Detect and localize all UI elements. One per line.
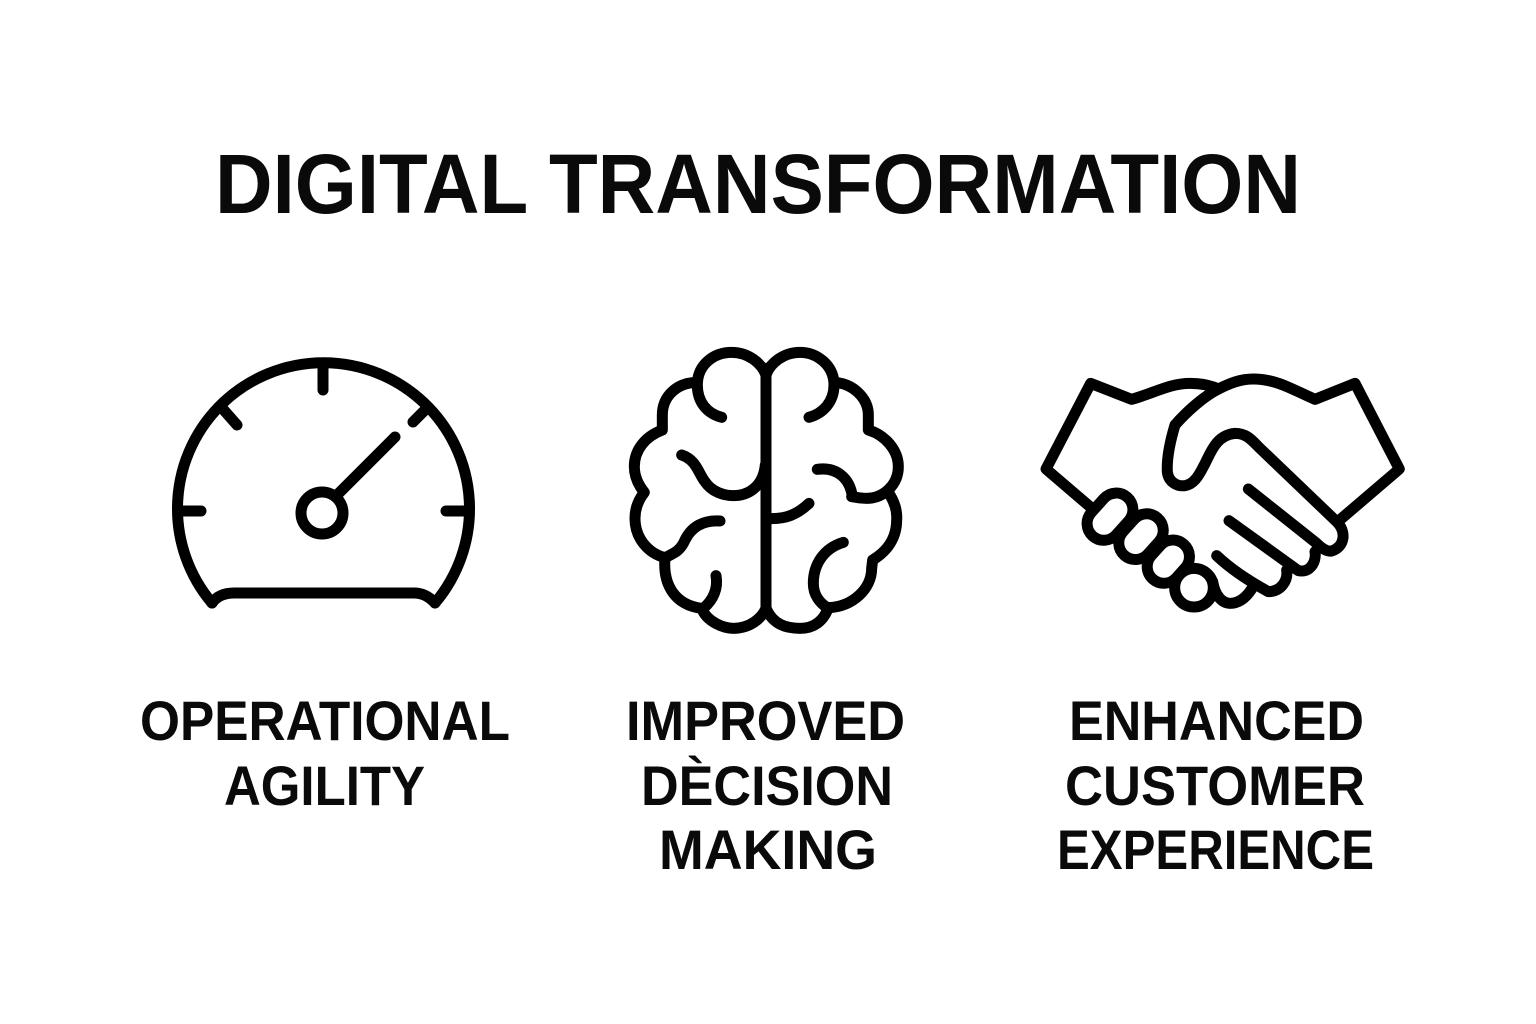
icon: speedometer gauge <box>178 363 470 603</box>
label: operational agility <box>140 689 510 817</box>
label: improved decision making: DÈCISION <box>641 754 893 817</box>
label: improved decision making: IMPROVED <box>626 689 905 752</box>
label: enhanced customer experience: CUSTOMER <box>1065 754 1365 817</box>
title: DIGITAL TRANSFORMATION <box>215 137 1301 231</box>
label: improved decision making: MAKING <box>659 818 877 881</box>
icon: handshake <box>1046 379 1399 607</box>
icon: brain <box>634 352 898 628</box>
label: enhanced customer experience: ENHANCED <box>1069 689 1364 752</box>
label: operational agility: OPERATIONAL <box>140 689 510 752</box>
label: enhanced customer experience: EXPERIENCE <box>1057 818 1374 881</box>
label: improved decision making <box>626 689 905 881</box>
label: enhanced customer experience <box>1057 689 1374 881</box>
label: operational agility: AGILITY <box>224 754 425 817</box>
